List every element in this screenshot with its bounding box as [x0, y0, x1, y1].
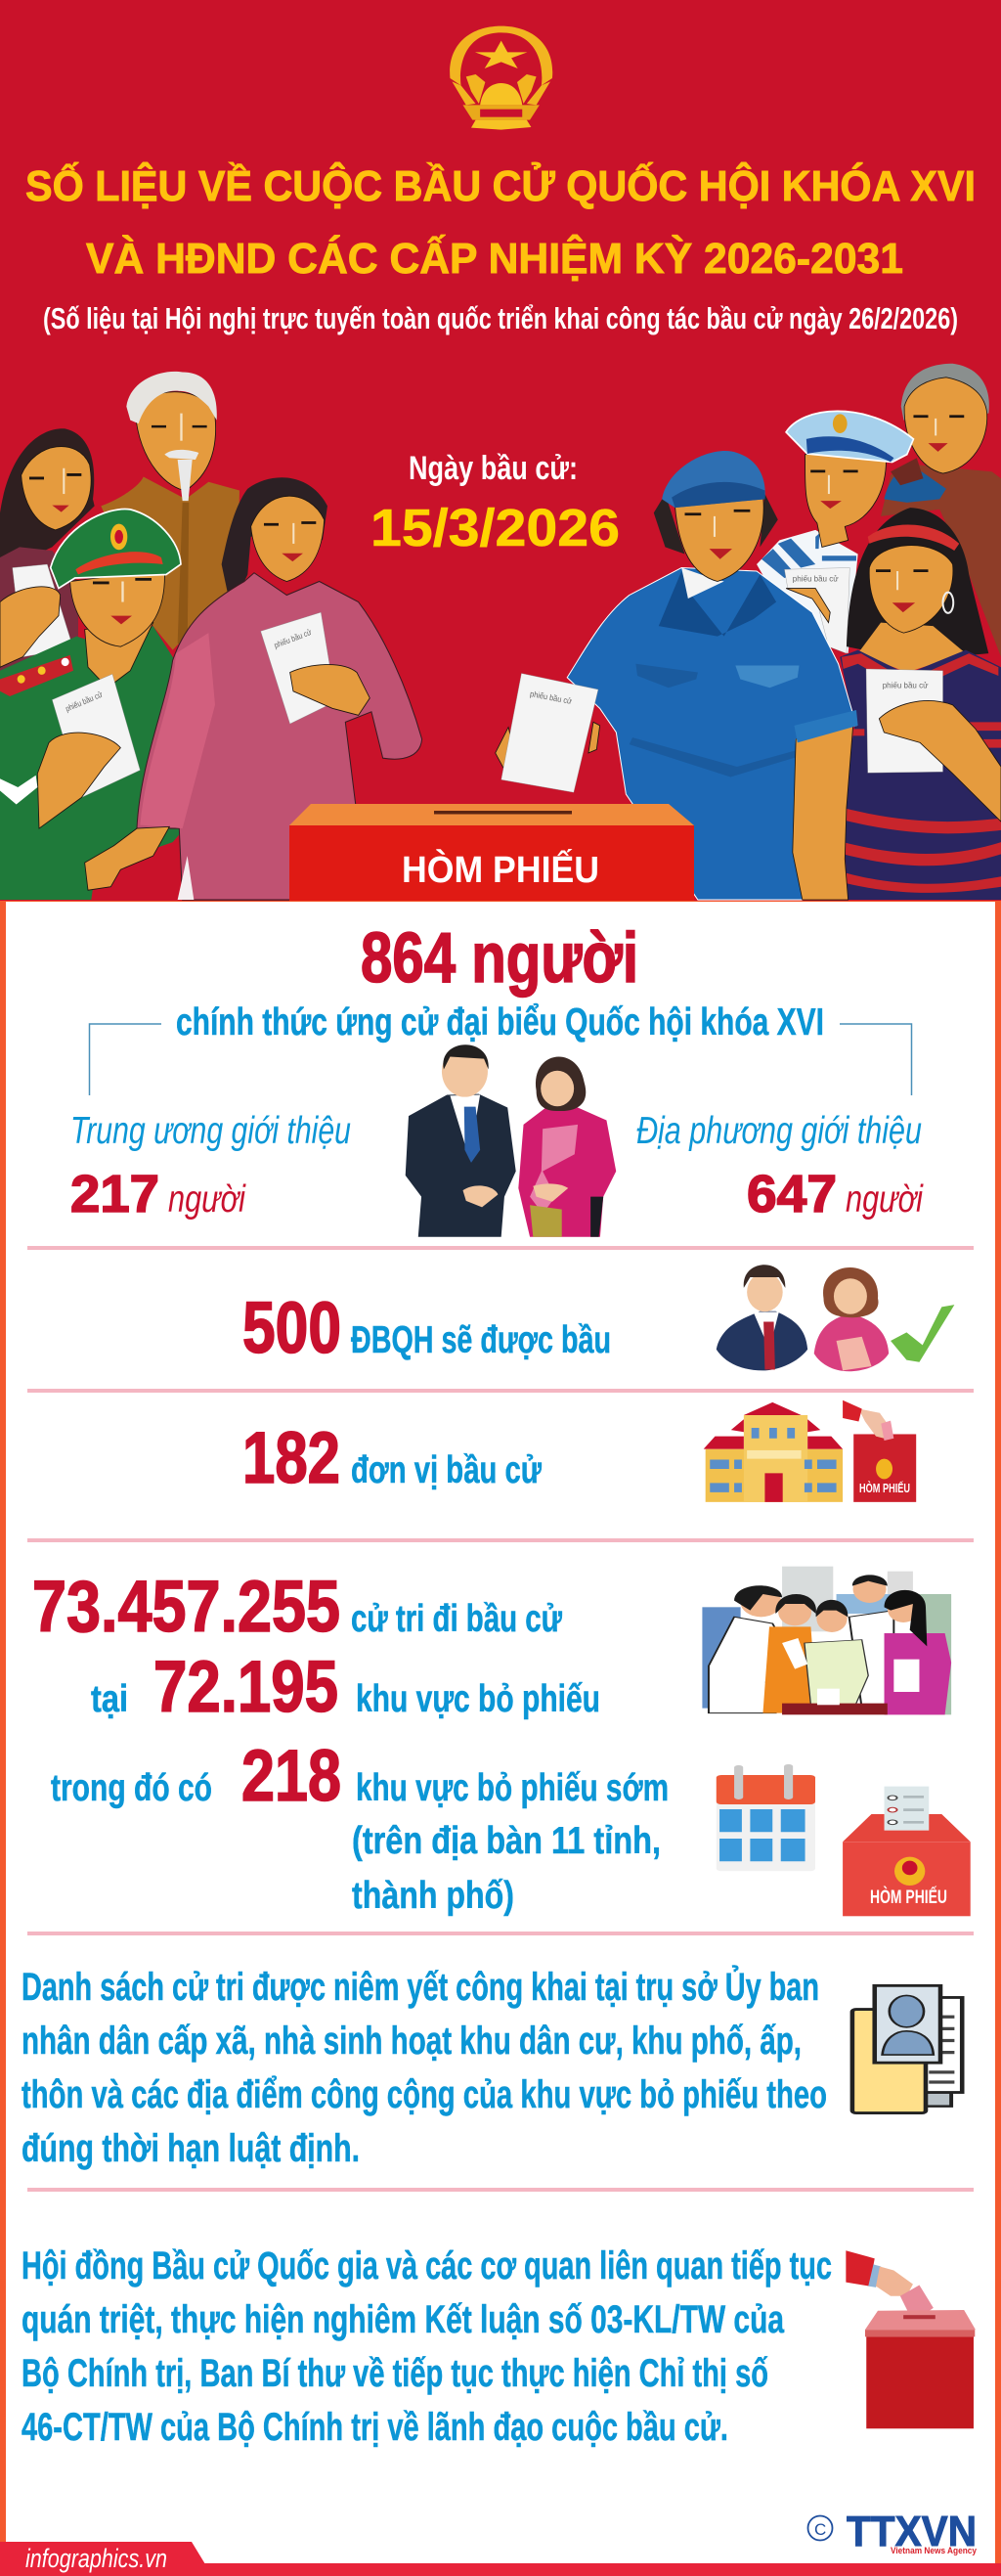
icon: hand casting ballot into box [846, 2250, 976, 2428]
icon: national emblem [450, 26, 552, 130]
stat: 182 constituencies: đơn vị bầu cử [351, 1449, 543, 1491]
voter: worker: phiếu bầu cử [529, 689, 573, 706]
stat: early polling areas: 218 [241, 1735, 341, 1816]
stat: early polling areas [51, 1735, 669, 1917]
divider [27, 1389, 974, 1393]
title [25, 160, 976, 283]
divider [27, 2188, 974, 2192]
stat: voters: cử tri đi bầu cử [351, 1598, 563, 1640]
voter: soldier [0, 509, 215, 900]
footer bar [0, 2542, 1001, 2576]
divider [27, 1538, 974, 1542]
logo: TTXVN: TTXVN [847, 2508, 977, 2555]
stat: 182 constituencies [242, 1417, 543, 1498]
stat: polling areas [91, 1646, 600, 1727]
voter: woman with ballot [0, 428, 95, 671]
election date label: Ngày bầu cử: [409, 450, 578, 487]
stat: early polling areas: trong đó có [51, 1767, 212, 1809]
left bracket line [90, 1024, 161, 1095]
icon: calendar [717, 1764, 815, 1871]
local nominations: người [846, 1178, 924, 1221]
stat: polling areas: tại [91, 1678, 128, 1720]
stat: early polling areas: khu vực bỏ phiếu sớm [356, 1767, 669, 1809]
icon: ballot box with ballot [843, 1787, 971, 1916]
stat: voters: 73.457.255 [32, 1566, 340, 1647]
icon: two delegates with check mark [717, 1265, 954, 1371]
illustration: ballot box [289, 804, 694, 902]
ballot box caption: HÒM PHIẾU [859, 1481, 910, 1495]
title line 2: VÀ HĐND CÁC CẤP NHIỆM KỲ 2026-2031 [86, 234, 903, 283]
local nominations: 647 [747, 1165, 837, 1223]
illustration: voters on the right [496, 364, 1001, 900]
central nominations [70, 1110, 351, 1223]
ballot box label: HÒM PHIẾU [402, 848, 599, 891]
icon: voters at ballot box [702, 1567, 951, 1714]
text block: voter list posting [22, 1964, 827, 2170]
voter: monk [881, 364, 1001, 657]
footer site name: infographics.vn [25, 2544, 167, 2573]
illustration: voters on the left [0, 372, 422, 900]
election date: 15/3/2026 [370, 499, 620, 557]
voter: woman in ao dai [85, 477, 422, 900]
central nominations: người [168, 1178, 246, 1221]
headline figure: 864 candidates: 864 người [361, 919, 638, 998]
red header background [0, 0, 1001, 902]
divider [27, 1246, 974, 1250]
stat: 500 deputies: ĐBQH sẽ được bầu [351, 1319, 611, 1361]
text block: national election council [22, 2244, 832, 2449]
voter: ethnic minority woman [840, 508, 1001, 900]
voter: sailor [757, 411, 913, 653]
local nominations: Địa phương giới thiệu [636, 1110, 922, 1152]
text block: voter list posting: đúng thời hạn luật định. [22, 2127, 360, 2170]
stat: polling areas: khu vực bỏ phiếu [356, 1678, 600, 1720]
logo: TTXVN: Vietnam News Agency [891, 2546, 978, 2556]
stat: 182 constituencies: 182 [242, 1417, 340, 1498]
icon: building and ballot box [704, 1400, 916, 1502]
stat: 500 deputies [242, 1287, 611, 1368]
voter: ethnic minority woman: phiếu bầu cử [883, 681, 929, 689]
panel: statistics [0, 901, 1001, 2576]
icon: delegate couple [406, 1044, 616, 1237]
stat: early polling areas: thành phố) [352, 1875, 514, 1917]
stat: voters [32, 1566, 563, 1647]
logo: TTXVN: C [814, 2520, 826, 2539]
voter: woman in ao dai: phiếu bầu cử [273, 628, 313, 650]
voter: soldier: phiếu bầu cử [65, 689, 105, 714]
stat: 500 deputies: 500 [242, 1287, 341, 1368]
voter: worker [496, 451, 858, 900]
divider [27, 1932, 974, 1935]
local nominations [636, 1110, 924, 1223]
candidates caption: chính thức ứng cử đại biểu Quốc hội khóa XVI [176, 1001, 824, 1044]
central nominations: 217 [70, 1165, 159, 1223]
icon: voter documents [852, 1985, 962, 2113]
stat: early polling areas: (trên địa bàn 11 tỉnh, [352, 1820, 661, 1862]
voter: sailor: phiếu bầu cử [793, 574, 839, 584]
early ballot box caption: HÒM PHIẾU [870, 1887, 947, 1908]
stat: polling areas: 72.195 [153, 1646, 338, 1727]
right bracket line [840, 1024, 911, 1095]
voter: elder [101, 372, 239, 650]
text block: national election council: 46-CT/TW của Bộ Chính trị về lãnh đạo cuộc bầu cử. [22, 2406, 728, 2449]
central nominations: Trung ương giới thiệu [70, 1110, 351, 1152]
